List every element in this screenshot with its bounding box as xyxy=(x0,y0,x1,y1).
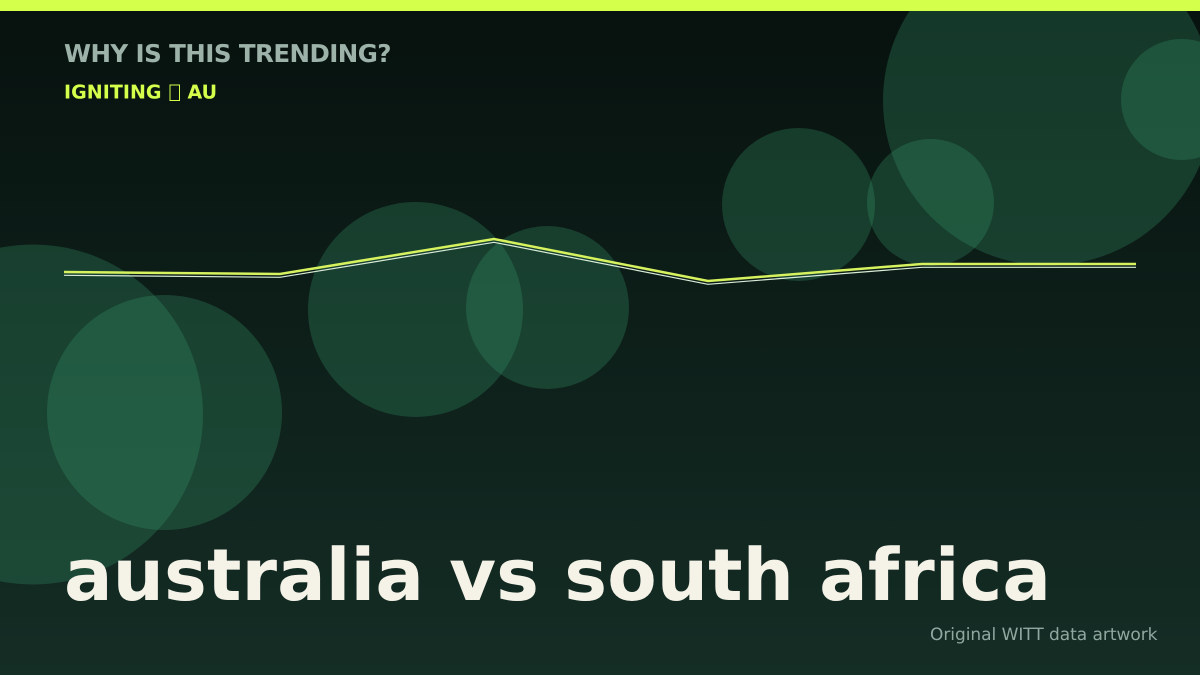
status label: AU xyxy=(188,82,217,104)
status label: IGNITING xyxy=(64,82,162,104)
credit line: Original WITT data artwork xyxy=(930,625,1158,645)
top accent bar xyxy=(0,0,1200,11)
heading: WHY IS THIS TRENDING? xyxy=(64,39,392,68)
trend line chart xyxy=(64,239,1136,284)
icon: missing glyph box xyxy=(170,85,180,100)
trend line: shadow xyxy=(64,242,1136,284)
main title: australia vs south africa xyxy=(64,533,1051,617)
trend line: main xyxy=(64,239,1136,281)
status label xyxy=(64,82,217,104)
